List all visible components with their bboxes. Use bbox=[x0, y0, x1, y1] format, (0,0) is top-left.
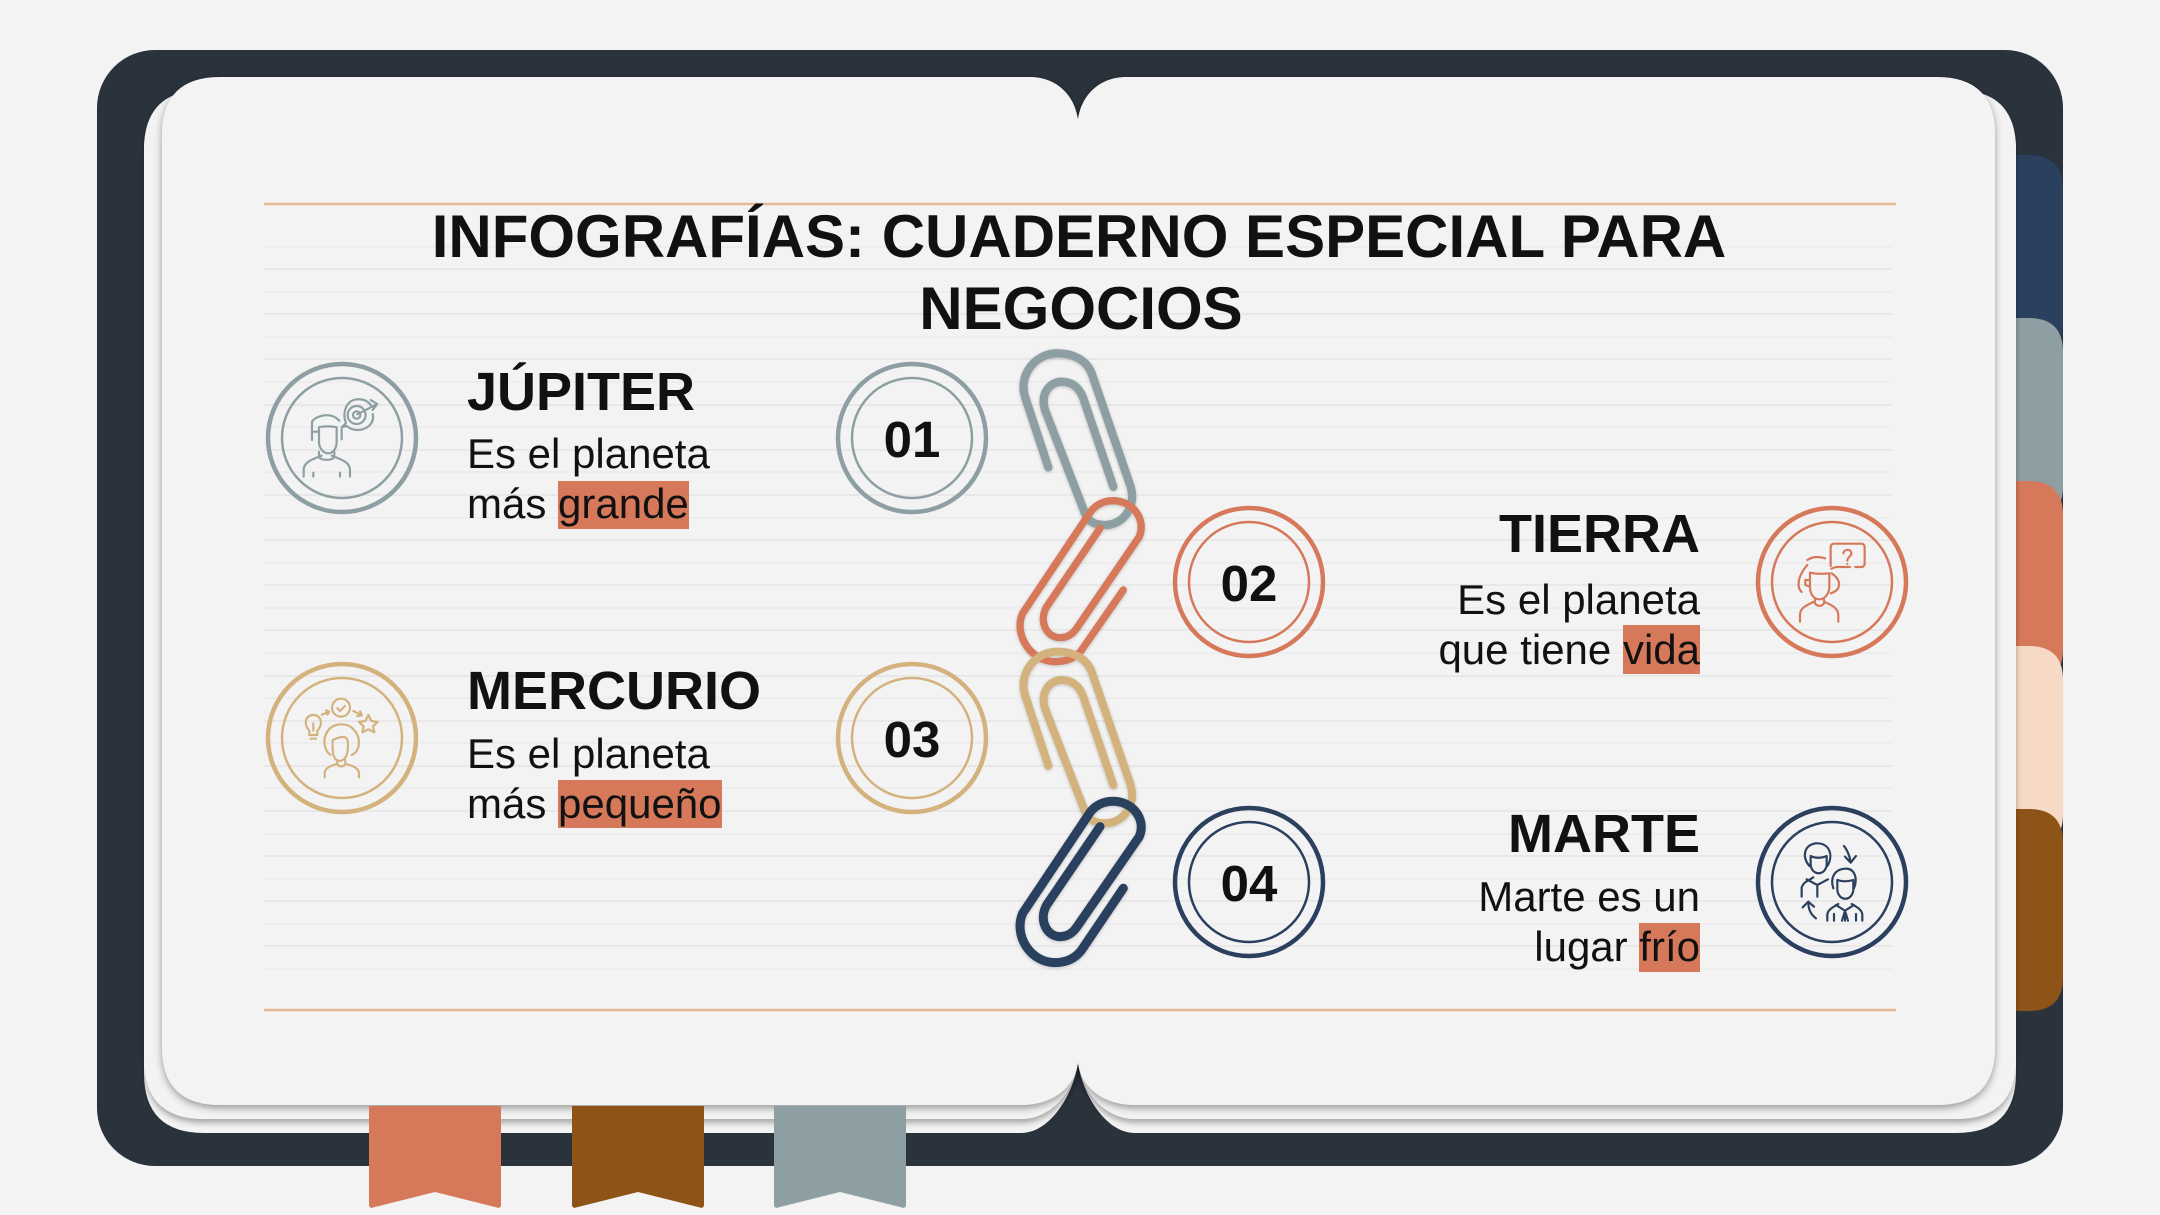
description: Es el planeta bbox=[1457, 576, 1701, 623]
number badge bbox=[1175, 808, 1323, 956]
item: Júpiter bbox=[268, 362, 986, 529]
number badge: 03 bbox=[884, 711, 940, 768]
description bbox=[467, 730, 722, 828]
title bbox=[432, 203, 1726, 342]
item: Tierra bbox=[1175, 504, 1906, 674]
number badge bbox=[838, 364, 986, 512]
icon: two people exchanging bbox=[1758, 808, 1906, 956]
title: NEGOCIOS bbox=[919, 275, 1243, 342]
description bbox=[1478, 873, 1700, 972]
description bbox=[467, 430, 710, 529]
icon: woman with idea, check, star bbox=[268, 664, 416, 812]
tab: coral bbox=[2010, 481, 2063, 683]
description bbox=[1438, 576, 1701, 674]
front page bbox=[162, 77, 1995, 1105]
description: más grande bbox=[467, 480, 689, 527]
tab: slate bbox=[2010, 318, 2063, 520]
ruled lines bbox=[264, 247, 1892, 969]
number badge bbox=[1175, 508, 1323, 656]
icon: person with target bbox=[268, 364, 416, 512]
number badge: 01 bbox=[884, 411, 940, 468]
paperclips bbox=[1020, 353, 1141, 963]
number badge: 04 bbox=[1221, 855, 1278, 912]
description: Es el planeta bbox=[467, 730, 710, 777]
heading: MARTE bbox=[1508, 804, 1700, 864]
notebook pages bbox=[144, 77, 2016, 1133]
bookmarks bbox=[369, 1106, 906, 1208]
title: INFOGRAFÍAS: CUADERNO ESPECIAL PARA bbox=[432, 203, 1726, 270]
heading: TIERRA bbox=[1499, 504, 1700, 564]
description: lugar frío bbox=[1534, 923, 1700, 970]
description: Marte es un bbox=[1478, 873, 1700, 920]
bookmark: brown bbox=[572, 1106, 704, 1208]
paperclip: coral bbox=[1020, 501, 1141, 662]
item: Mercurio bbox=[268, 661, 986, 828]
icon: person with question bbox=[1758, 508, 1906, 656]
paperclip: slate bbox=[1024, 353, 1132, 525]
tab: brown bbox=[2010, 809, 2063, 1011]
number badge bbox=[838, 664, 986, 812]
side tabs bbox=[2010, 155, 2063, 1011]
description: más pequeño bbox=[467, 780, 722, 827]
description: que tiene vida bbox=[1438, 626, 1701, 673]
tab: navy bbox=[2010, 155, 2063, 357]
item: Marte bbox=[1175, 804, 1906, 972]
number badge: 02 bbox=[1221, 555, 1277, 612]
heading: MERCURIO bbox=[467, 661, 761, 721]
heading: JÚPITER bbox=[467, 362, 695, 422]
paperclip: navy bbox=[1020, 801, 1141, 963]
back page bbox=[144, 90, 2016, 1133]
tab: peach bbox=[2010, 646, 2063, 848]
bookmark: slate bbox=[774, 1106, 906, 1208]
description: Es el planeta bbox=[467, 430, 710, 477]
middle page bbox=[144, 90, 2016, 1119]
bookmark: coral bbox=[369, 1106, 501, 1208]
paperclip: tan bbox=[1024, 652, 1132, 823]
